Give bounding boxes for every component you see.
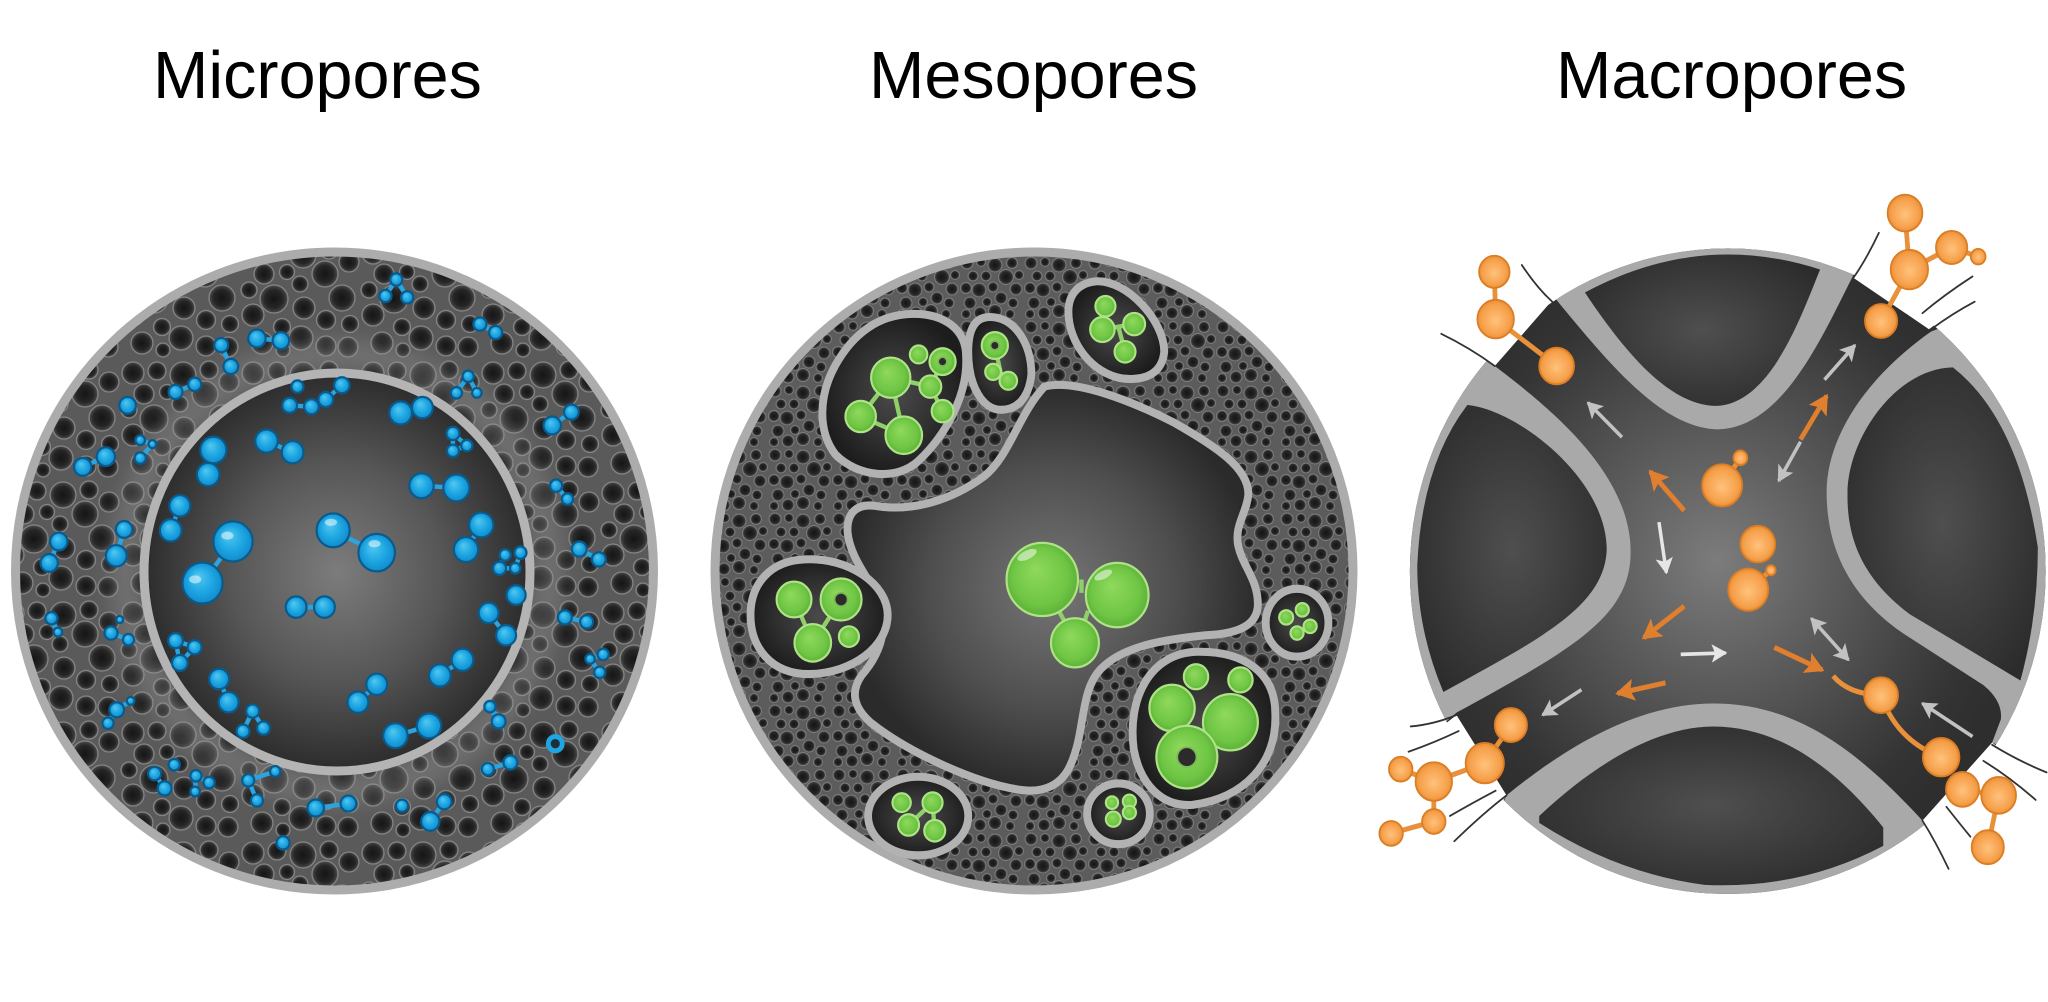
dark chamber: bottom	[1539, 726, 1883, 885]
pores and green molecules	[751, 281, 1328, 855]
title: Micropores: Micropores	[153, 39, 482, 113]
pore: bottom left with molecule	[868, 777, 968, 855]
pore: left with molecule	[751, 559, 888, 674]
panel: mesopores circle	[715, 252, 1353, 890]
central green molecule	[1007, 543, 1149, 667]
pore: right small with molecule	[1266, 589, 1328, 657]
soft glow around central pore	[125, 354, 549, 790]
pore: upper left with molecule	[822, 314, 966, 474]
blue molecules	[41, 273, 609, 850]
panel: micropores circle	[16, 252, 654, 890]
title: Macropores: Macropores	[1556, 39, 1907, 113]
dark chamber: top	[1585, 254, 1820, 406]
foam wall with outer rim	[715, 252, 1353, 890]
thin swoosh lines at channel openings	[1409, 233, 2047, 869]
white cuts at channel openings	[1378, 198, 2048, 906]
pore: lower right with molecule	[1133, 652, 1275, 805]
pore: bottom small with molecule	[1087, 783, 1150, 844]
title: Mesopores: Mesopores	[869, 39, 1198, 113]
molecules inside central pore	[160, 377, 527, 748]
orange molecules	[1379, 195, 2016, 864]
grey and white arrows	[1543, 345, 1973, 737]
pore: upper narrow with molecule	[968, 317, 1031, 410]
channel disc	[1410, 248, 2046, 894]
central pore	[144, 373, 530, 771]
pore: top right with molecule	[1068, 281, 1164, 379]
grey pore walls	[1410, 248, 2046, 894]
panel: macropores circle	[1365, 195, 2048, 915]
dark chamber: right	[1847, 367, 2038, 681]
orange arrows	[1618, 396, 1827, 693]
molecules in foam wall	[41, 273, 609, 850]
foam wall with outer rim	[16, 252, 654, 890]
large central pore	[848, 385, 1258, 791]
dark chamber: left	[1417, 405, 1607, 692]
